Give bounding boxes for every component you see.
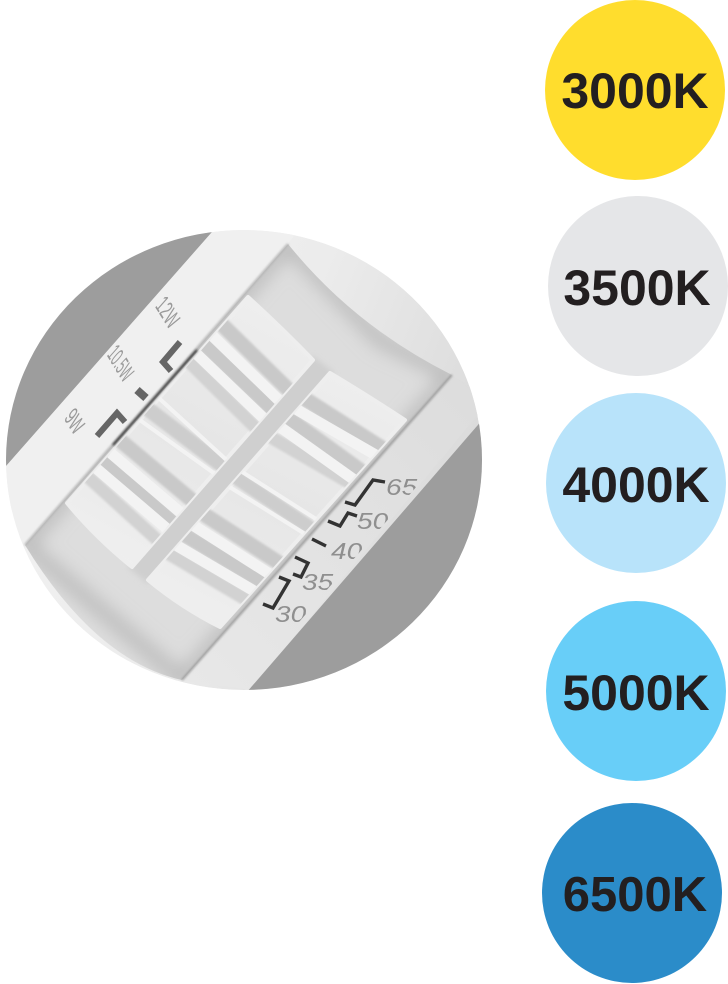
9W tick (97, 413, 125, 436)
35 label: 35 (302, 570, 334, 595)
30 tick (263, 577, 289, 608)
9W label: 9W (60, 403, 89, 441)
badge: 6500K: 6500K (563, 868, 707, 922)
right strip (470, 387, 478, 415)
colour temperature ticks (263, 480, 385, 608)
wattage ticks (97, 342, 180, 436)
30 label: 30 (275, 602, 307, 627)
wattage labels (60, 291, 184, 441)
10.5W tick (137, 390, 146, 398)
badge: 4000K (546, 393, 726, 573)
badge: 4000K: 4000K (562, 457, 710, 513)
colour temperature labels (275, 475, 418, 627)
65 tick (345, 480, 385, 505)
12W label: 12W (151, 291, 184, 335)
40 tick (312, 539, 326, 546)
badge: 5000K: 5000K (562, 665, 710, 721)
badge: 3000K (545, 0, 725, 180)
product close-up: dimmer switches (6, 230, 482, 690)
recess (25, 244, 452, 680)
12W tick (163, 342, 180, 371)
right switch pad (148, 373, 405, 627)
10.5W label: 10.5W (102, 340, 137, 389)
badge: 3000K: 3000K (561, 63, 709, 119)
left strip (6, 232, 212, 466)
40 label: 40 (331, 539, 363, 564)
badge: 3500K (548, 196, 728, 376)
badge: 6500K (542, 803, 722, 983)
50 label: 50 (357, 509, 389, 534)
background upper left (6, 232, 212, 466)
badge: 3500K: 3500K (563, 260, 711, 316)
50 tick (328, 513, 357, 526)
left switch pad (67, 297, 313, 567)
inner edge shadows (25, 244, 288, 545)
65 label: 65 (386, 475, 418, 500)
background lower right (248, 424, 482, 690)
badge: 5000K (546, 601, 726, 781)
35 tick (293, 557, 308, 577)
fixture body (6, 230, 482, 690)
